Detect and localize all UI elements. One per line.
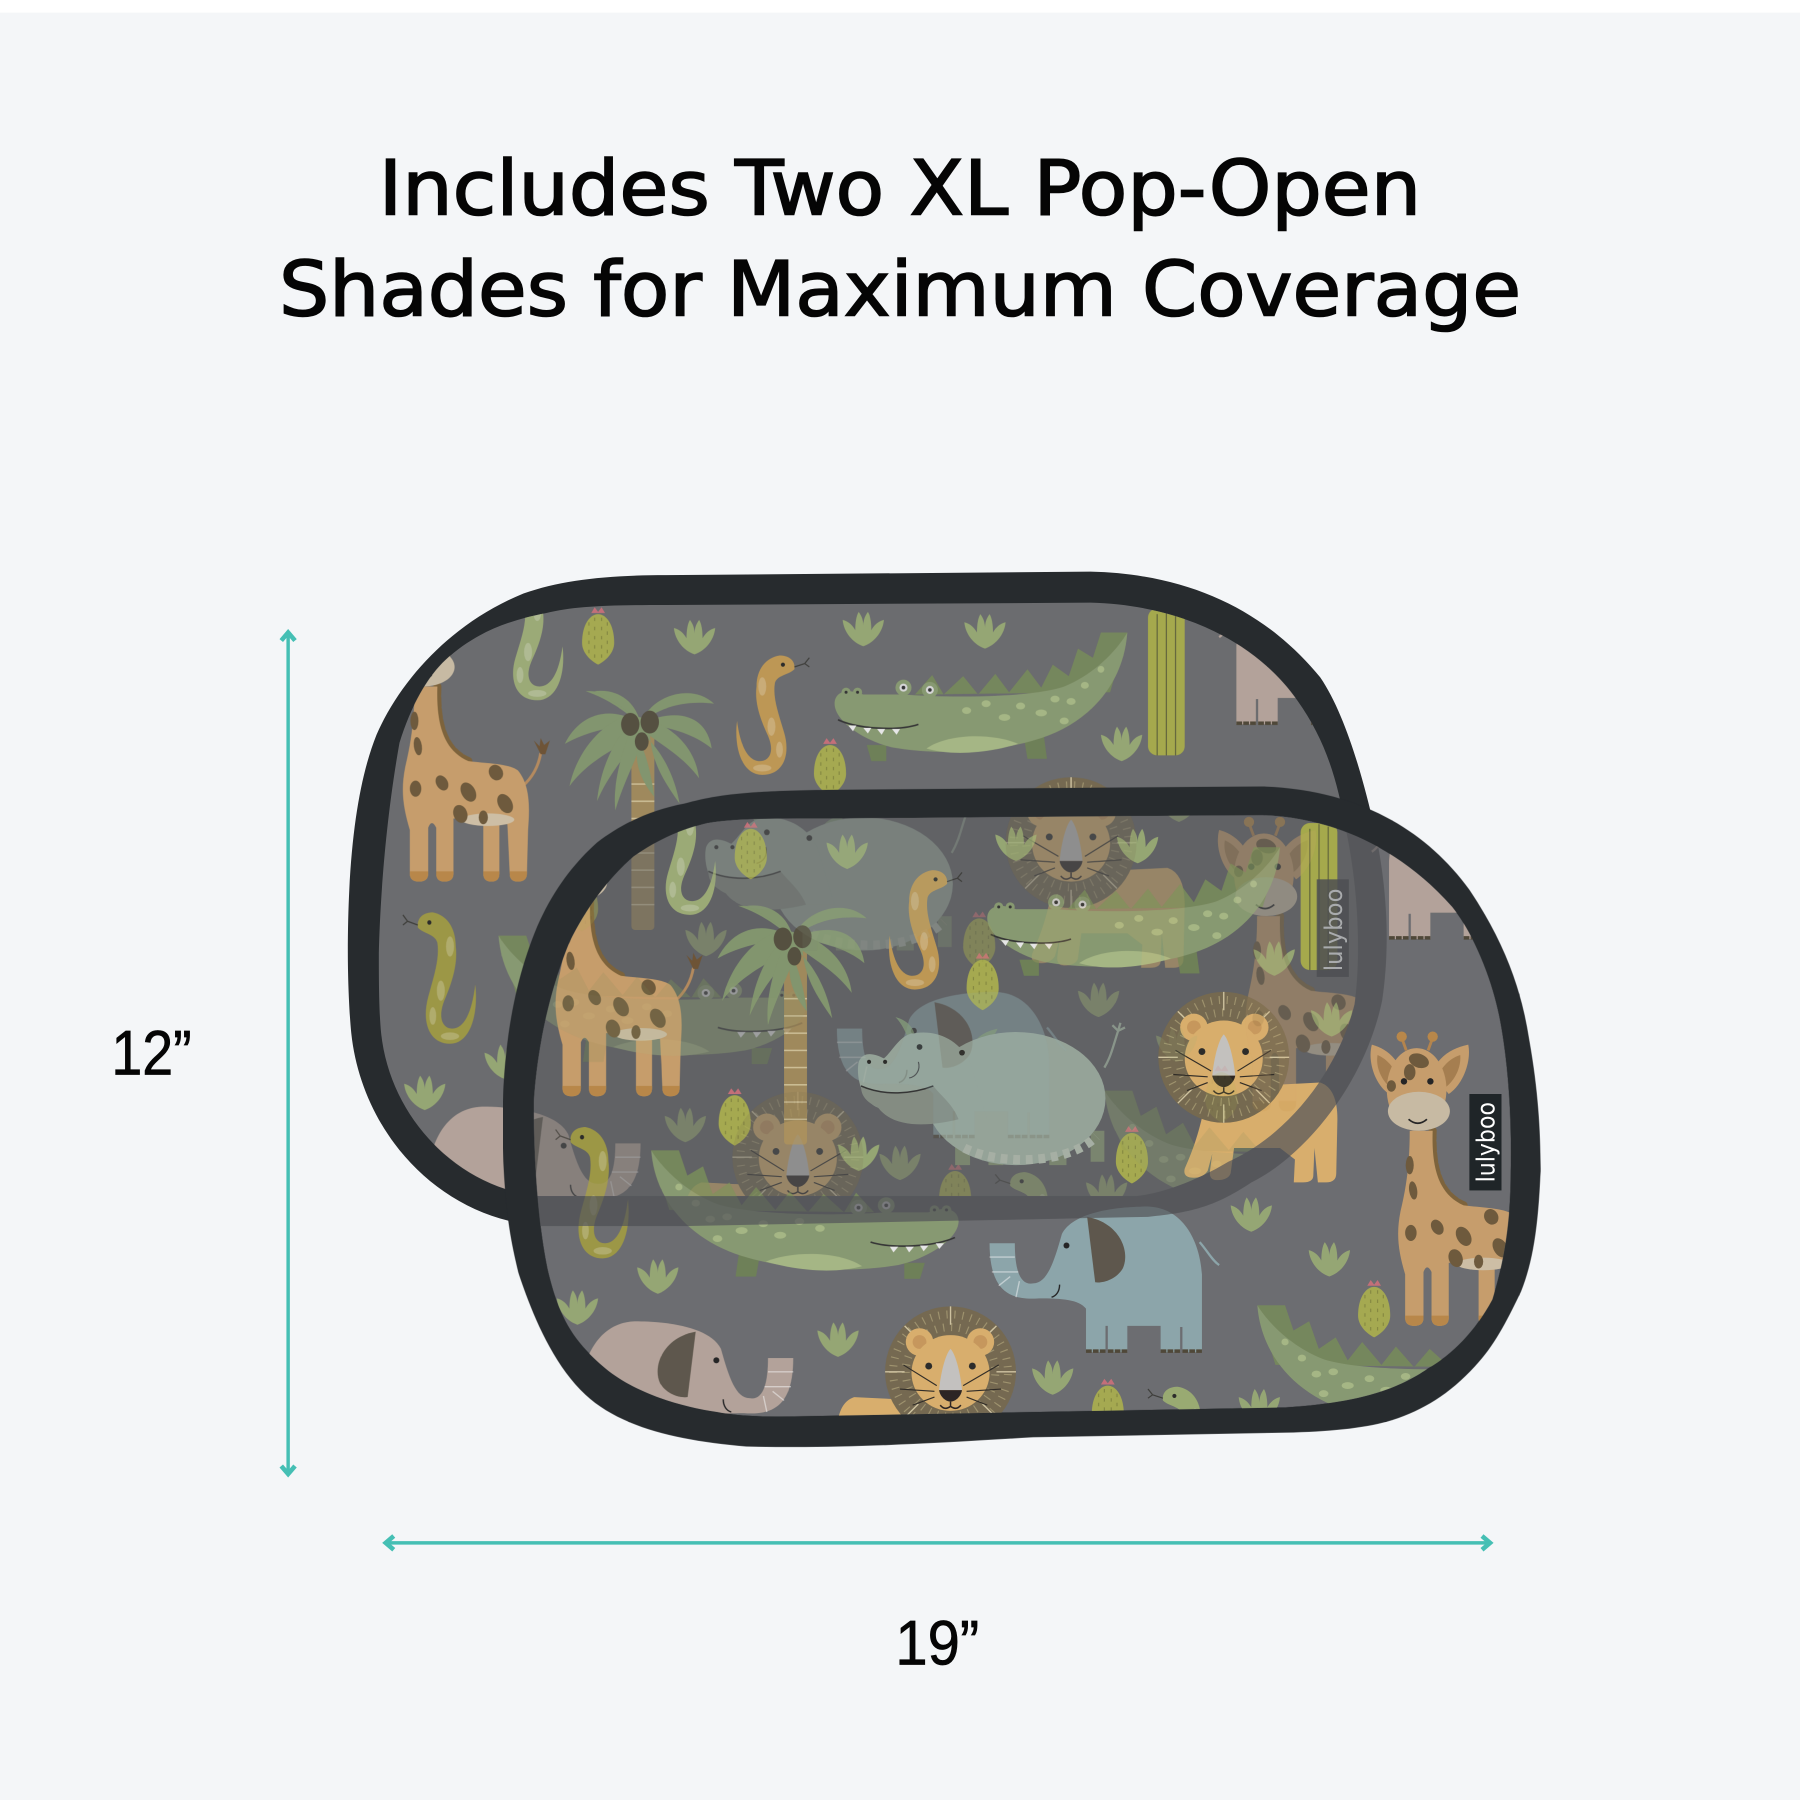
title: Shades for Maximum Coverage xyxy=(279,246,1521,334)
orange snake xyxy=(889,870,962,990)
tall cactus xyxy=(1301,823,1337,970)
pink elephant bottom xyxy=(564,1321,793,1467)
panel: front sun shade xyxy=(503,786,1541,1448)
safari animal print xyxy=(528,793,1601,1506)
blue elephant xyxy=(990,1207,1219,1352)
green snake xyxy=(643,796,716,915)
crocodile upper xyxy=(987,847,1280,976)
label: 19 inch: 19” xyxy=(895,1609,979,1679)
arrow: width dimension xyxy=(386,1536,1490,1550)
small cacti xyxy=(719,822,1390,1436)
palm tree xyxy=(717,905,867,1145)
giraffe left xyxy=(528,802,703,1096)
label: 12 inch: 12” xyxy=(111,1018,192,1088)
title: Includes Two XL Pop-Open xyxy=(379,145,1421,233)
arrow: height dimension xyxy=(281,633,295,1474)
back shade print showing through xyxy=(536,816,1355,1196)
brand tag: lulyboo xyxy=(1472,1102,1501,1182)
pink elephant top right xyxy=(1372,793,1601,939)
lion standing xyxy=(1158,992,1337,1182)
ghost label: back shade tag seen through: lulyboo xyxy=(1320,889,1348,971)
lion bottom xyxy=(837,1306,1016,1497)
crocodile lower xyxy=(651,1150,959,1279)
light snake head xyxy=(1148,1387,1221,1506)
title xyxy=(279,145,1521,334)
giraffe right xyxy=(1371,1031,1545,1326)
panel: back sun shade xyxy=(348,572,1370,1221)
olive snake xyxy=(556,1127,629,1258)
back shade border showing through xyxy=(578,838,1378,1226)
rhino xyxy=(858,1017,1125,1165)
crocodile tail right xyxy=(1257,1305,1565,1434)
leaf tufts xyxy=(557,827,1352,1423)
